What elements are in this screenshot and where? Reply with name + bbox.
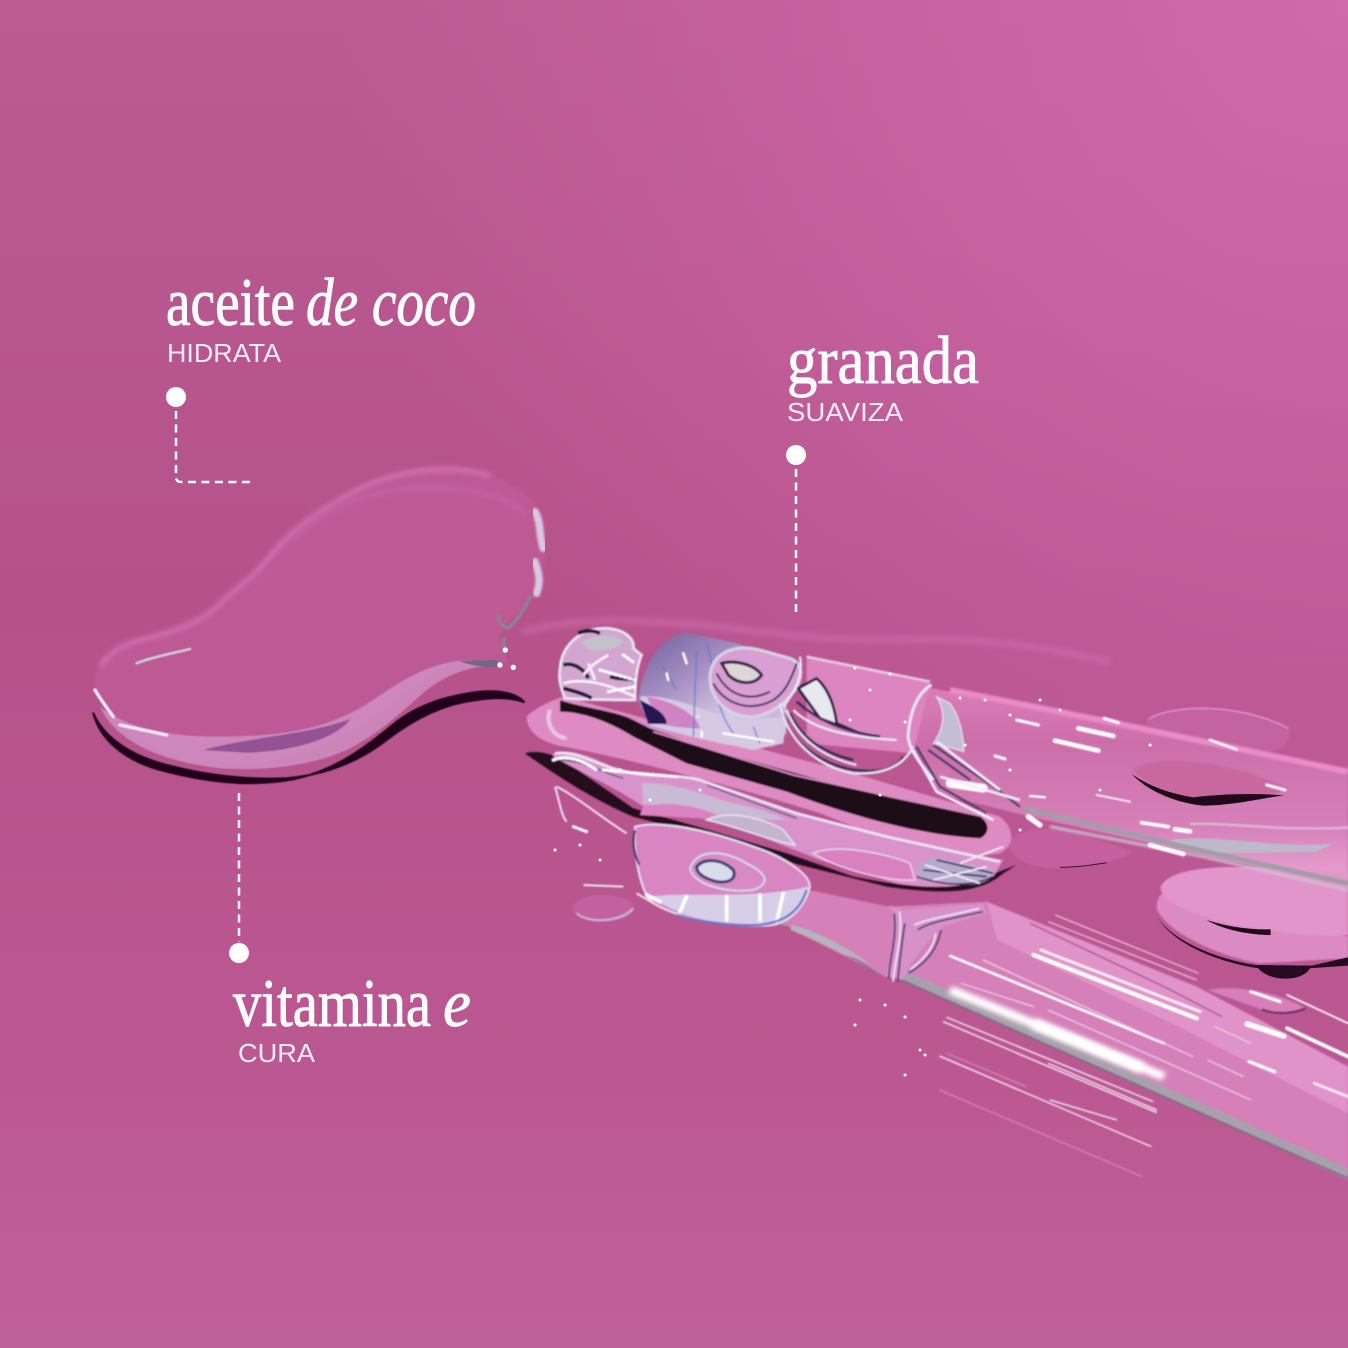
lens lower streaks (647, 893, 783, 922)
subtitle hidrata: HIDRATA (167, 338, 282, 368)
light lavender stripes (1190, 824, 1348, 829)
reflection top edge dark (560, 760, 797, 818)
dot (229, 943, 249, 963)
reflection top edge (555, 753, 1000, 862)
tube top dark edge (1030, 923, 1222, 1017)
blob highlights (137, 649, 190, 663)
connector: vitamina e (229, 793, 249, 963)
ring light lines (913, 742, 1020, 820)
lower droplet top (1161, 867, 1348, 936)
lower tube reflection (780, 890, 1348, 1180)
heading vitamina: vitamina (233, 965, 431, 1041)
label: aceite de coco (166, 264, 476, 368)
subtitle suaviza: SUAVIZA (787, 397, 904, 427)
reflection pink patch (640, 804, 727, 820)
left rod gray (791, 925, 869, 963)
body bright top edge (807, 657, 930, 682)
tube fill (780, 890, 1348, 1180)
droplet core (722, 662, 762, 683)
cluster lines (917, 860, 993, 884)
outer reflected lines (939, 1017, 1157, 1147)
dot (786, 445, 806, 465)
body glass (638, 633, 787, 747)
reflected tip glints (553, 758, 677, 832)
neck lines (889, 912, 983, 982)
crescent in lower droplet (1207, 920, 1271, 935)
blob shadow (93, 691, 524, 783)
reflection silver patch (642, 783, 787, 820)
upper tube section (890, 680, 1348, 979)
droplet in tube (1133, 761, 1287, 800)
dashed line (238, 793, 240, 942)
droplet top rim (1148, 708, 1288, 728)
reflection tube (553, 752, 1003, 887)
dot (166, 387, 186, 407)
lens pool (635, 825, 810, 926)
dropper tip bulb (559, 628, 642, 700)
body streaks (663, 643, 760, 743)
lower droplet dark edge (1156, 914, 1348, 979)
rod pale edge (1050, 827, 1348, 890)
reflected tip marks (555, 787, 653, 903)
ring silver (933, 697, 964, 752)
droplet rim (577, 908, 633, 920)
eye core (697, 861, 734, 882)
top bright edge (950, 690, 1348, 772)
tip dark marks (563, 631, 635, 698)
tip curve (498, 597, 530, 653)
neck light lines (893, 908, 979, 982)
capsule (813, 849, 915, 880)
rod white core (1034, 1023, 1142, 1068)
tip sparkle chain (600, 655, 635, 692)
reflected small droplet (573, 895, 634, 922)
gray wide streak (1170, 838, 1333, 853)
body white glints (667, 653, 773, 742)
surface ripples (522, 621, 1110, 662)
pool left glare (549, 710, 567, 738)
gray rod (1023, 808, 1348, 883)
tip white cross (563, 655, 635, 697)
faint reflected lines (939, 1053, 1142, 1177)
inner droplet (710, 648, 801, 717)
cluster light lines (925, 847, 1003, 883)
white glints (950, 718, 1285, 854)
heading granada: granada (787, 322, 979, 398)
rod bright section (950, 990, 1164, 1077)
lower puddle (1007, 829, 1133, 868)
right edge beads (535, 512, 543, 593)
heading aceite: aceite (166, 264, 295, 340)
body pink patch (647, 697, 700, 728)
connector: granada (786, 445, 806, 615)
underside stripe (653, 732, 883, 795)
neck (885, 903, 987, 980)
small droplet on tube (1208, 988, 1305, 1013)
rim gray band (460, 660, 498, 667)
upper droplet (1147, 708, 1290, 752)
label: vitamina e (233, 965, 471, 1068)
left rod (780, 925, 880, 975)
right silver cluster (917, 857, 994, 885)
lens left dark (634, 830, 639, 865)
thin streaks (961, 915, 1251, 1100)
lower droplet base (1157, 889, 1348, 963)
lens lower glass (652, 887, 808, 926)
blob left glint (95, 690, 167, 735)
collar arcs dark (783, 702, 903, 771)
tip glints (500, 650, 513, 667)
droplet arcs (713, 663, 797, 706)
ring lines (917, 745, 1020, 813)
heading de coco: de coco (306, 264, 476, 340)
collar arcs light (780, 657, 913, 774)
oil blob (93, 467, 546, 783)
liquid pool (527, 697, 1011, 856)
label: granada (787, 322, 979, 427)
oval above lens (707, 815, 795, 845)
subtitle cura: CURA (238, 1038, 316, 1068)
puddle dark line (1060, 863, 1107, 867)
blob upper rim (100, 469, 490, 667)
tip window (582, 636, 623, 651)
connector: aceite de coco (166, 387, 253, 482)
dashed line (795, 469, 797, 615)
blob lower rim (100, 661, 500, 769)
lens blue edge (677, 890, 807, 925)
silver triangle (798, 678, 860, 733)
tube lighter top (987, 902, 1348, 1113)
main rod (903, 975, 1348, 1173)
tube body (890, 680, 1348, 887)
dropper and reflection (525, 628, 1020, 926)
wide white streaks (950, 950, 1348, 1097)
droplet dark line (1262, 1008, 1305, 1013)
upper tube in front of pool (807, 657, 930, 753)
blob lower inner shade (203, 719, 350, 753)
dashed elbow line (176, 411, 253, 482)
reflection dark line (525, 752, 1017, 891)
blob body (93, 467, 546, 765)
sparkles (555, 668, 1150, 1075)
heading e: e (443, 965, 471, 1041)
droplet crescent (1132, 774, 1284, 806)
rod dark edge (901, 980, 1348, 1178)
body light zone (640, 696, 787, 750)
ring (908, 685, 933, 780)
lens eye (690, 853, 765, 891)
body dark patch (640, 700, 667, 724)
blob upper ghost rim (293, 487, 527, 540)
dark underside (560, 700, 987, 838)
